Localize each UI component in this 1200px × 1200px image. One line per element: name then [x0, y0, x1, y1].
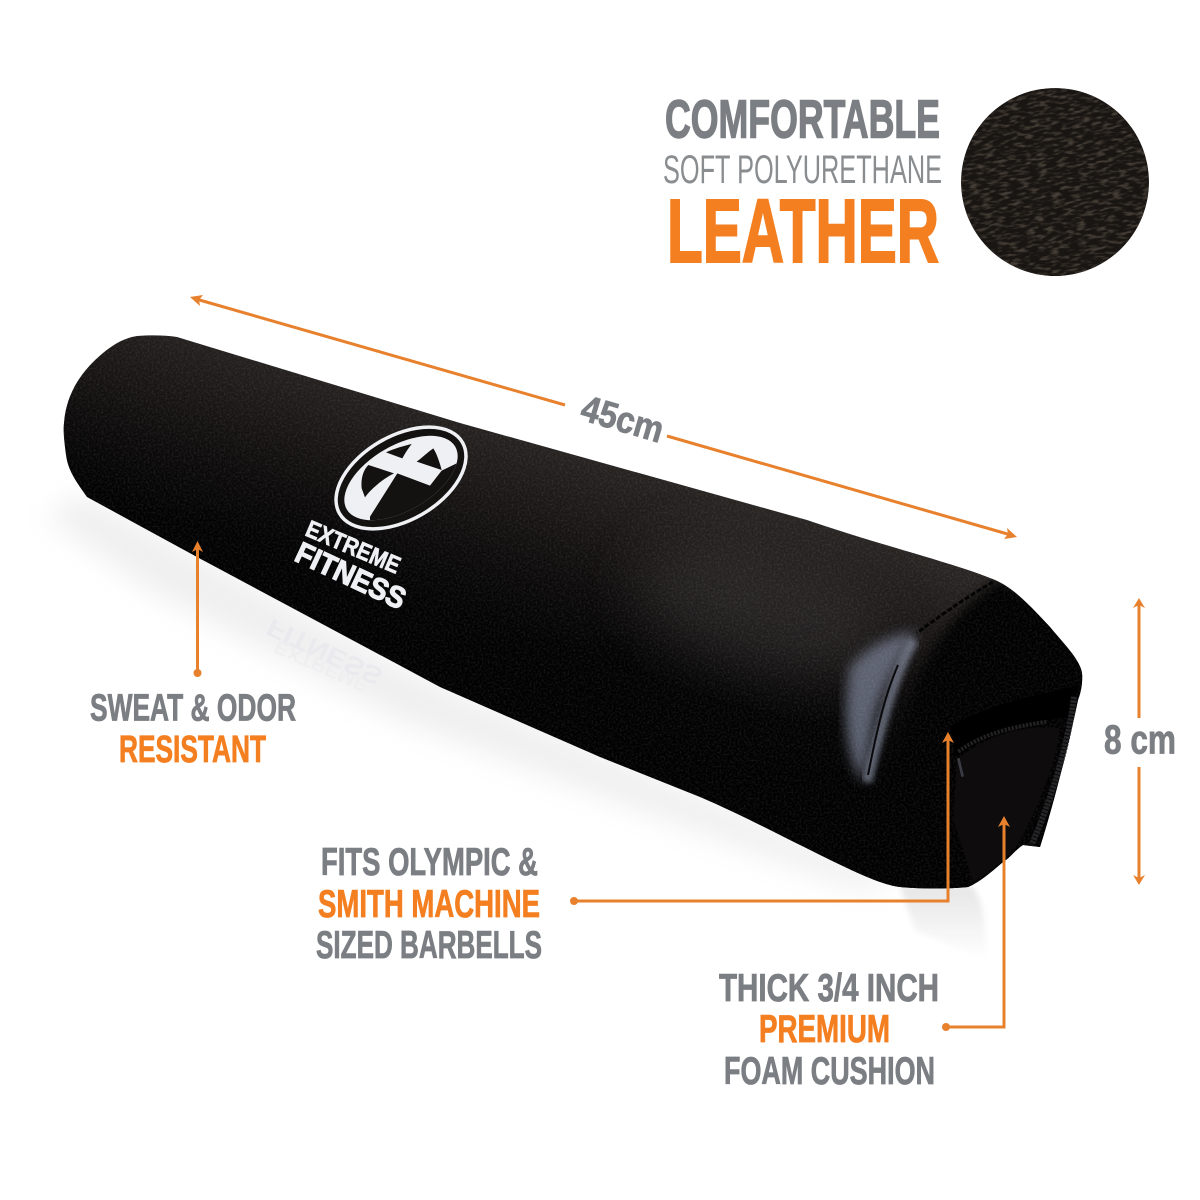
seam [917, 582, 993, 633]
pointer: barbell hole [570, 732, 954, 905]
broad sheen on the right of the body [639, 550, 874, 682]
mirrored logo reflection: FITNESS [263, 613, 387, 690]
callout text: sized barbells: SIZED BARBELLS [316, 924, 542, 967]
leather texture swatch [961, 88, 1149, 276]
callout text: thick 3/4 inch: THICK 3/4 INCH [719, 967, 939, 1010]
pointer: foam [942, 816, 1010, 1031]
logo wordmark: fitness: FITNESS [290, 536, 411, 616]
arrow: length right [667, 436, 1017, 539]
arrow: height down [1133, 767, 1145, 885]
callout: thick premium foam cushion [719, 816, 1010, 1093]
open end flap [950, 686, 1078, 882]
callout: sweat and odor resistant [90, 541, 296, 771]
callout text: premium: PREMIUM [759, 1008, 890, 1051]
glossy highlight [846, 632, 917, 783]
brand logo [294, 425, 468, 608]
logo wordmark: extreme: EXTREME [302, 516, 404, 580]
arrow: length left [190, 295, 565, 405]
heading line: leather: LEATHER [667, 182, 939, 282]
leather grain [40, 320, 1100, 910]
callout text: smith machine: SMITH MACHINE [318, 883, 540, 926]
callout: fits olympic and smith machine [316, 732, 954, 967]
callout text: foam cushion: FOAM CUSHION [724, 1050, 935, 1093]
length label: 45cm [576, 387, 669, 451]
logo emblem [334, 425, 468, 531]
callout text: sweat and odor: SWEAT & ODOR [90, 688, 296, 730]
arrow: height up [1133, 598, 1145, 718]
height label: 8 cm [1104, 716, 1176, 762]
heading line: soft polyurethane: SOFT POLYURETHANE [663, 148, 942, 192]
length dimension 45cm [190, 295, 1017, 539]
pointer: sweat [192, 541, 203, 677]
callout text: fits olympic: FITS OLYMPIC & [321, 841, 538, 884]
heading: comfortable soft polyurethane leather [663, 90, 942, 282]
callout text: resistant: RESISTANT [119, 729, 266, 771]
heading line: comfortable: COMFORTABLE [665, 90, 940, 150]
end cap [868, 578, 1082, 888]
floor shadow under the pad [45, 495, 986, 960]
black barbell pad [40, 320, 1100, 910]
height dimension 8 cm [1104, 598, 1176, 885]
mirrored logo reflection: EXTREME [271, 635, 371, 695]
